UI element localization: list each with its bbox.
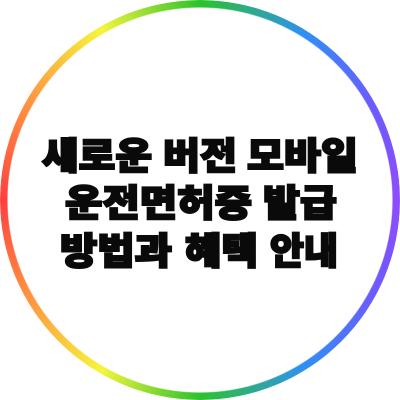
title line 1: 버전: [163, 136, 237, 177]
title line 1: [42, 136, 358, 177]
title line 2: [65, 183, 337, 224]
title line 2: 발급: [263, 183, 337, 224]
title line 3: 혜택: [185, 231, 258, 272]
title line 3: 안내: [270, 231, 338, 272]
title line 3: 방법과: [60, 231, 172, 272]
title line 1: 모바일: [247, 136, 358, 177]
title line 3: [60, 231, 338, 272]
title line 1: 새로운: [42, 136, 152, 177]
title line 2: 운전면허증: [65, 183, 252, 224]
